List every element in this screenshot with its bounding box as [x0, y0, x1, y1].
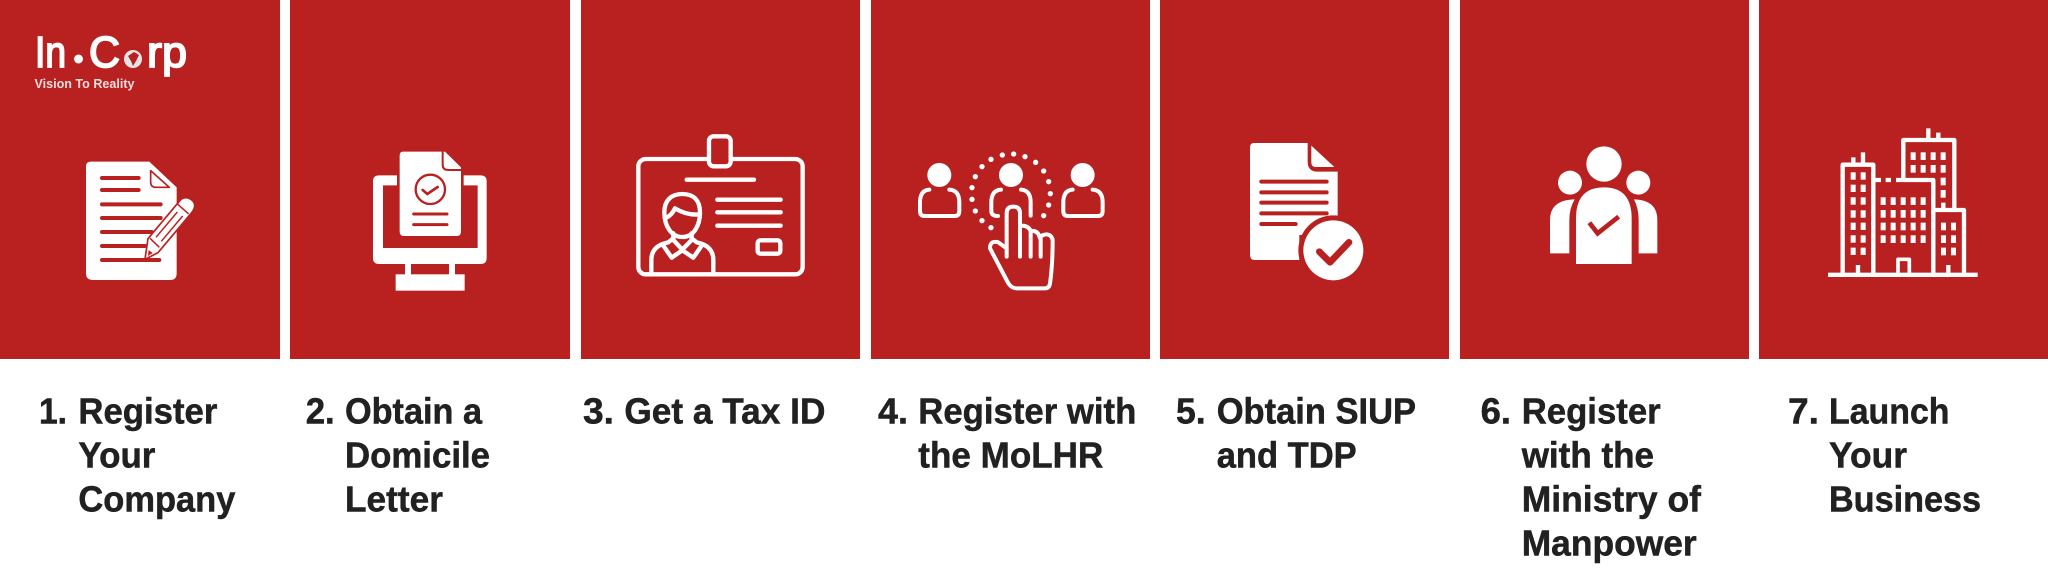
panel: step 2	[290, 0, 570, 359]
logo: InCorp: Vision To Reality	[34, 77, 135, 91]
caption: step 4: Register with	[918, 390, 1136, 432]
caption: step 7: 7.	[1788, 390, 1819, 432]
caption: step 1: Register	[78, 390, 217, 432]
panel: step 6	[1460, 0, 1749, 359]
icon: document with check badge	[1250, 143, 1368, 285]
icon: document with pencil	[86, 162, 195, 280]
logo: InCorp: C	[89, 28, 120, 77]
caption: step 7: Your	[1829, 434, 1907, 476]
caption: step 5: 5.	[1176, 390, 1206, 432]
icon: people selection with pointing hand	[920, 151, 1103, 288]
icon: team with check	[1550, 146, 1657, 264]
caption: step 1: Company	[78, 478, 235, 520]
caption: step 6: Ministry of	[1522, 478, 1702, 520]
icon: id card	[638, 136, 803, 274]
caption: step 5: Obtain SIUP	[1217, 390, 1416, 432]
caption: step 1	[39, 390, 235, 520]
panel: step 1	[0, 0, 280, 359]
icon: computer with document	[373, 151, 487, 291]
caption: step 4	[878, 390, 1136, 476]
caption: step 1: Your	[78, 434, 155, 476]
caption: step 5	[1176, 390, 1416, 476]
caption: step 6: with the	[1521, 434, 1654, 476]
logo: InCorp: In	[35, 28, 66, 77]
caption: step 7: Business	[1829, 478, 1981, 520]
panel: step 5	[1160, 0, 1449, 359]
caption: step 6: Manpower	[1522, 522, 1697, 564]
caption: step 6	[1481, 390, 1702, 564]
caption: step 2	[306, 390, 490, 520]
caption: step 2: Domicile	[345, 434, 490, 476]
caption: step 3: Get a Tax ID	[624, 390, 825, 432]
caption: step 4: 4.	[878, 390, 908, 432]
logo: InCorp: rp	[147, 28, 187, 77]
caption: step 2: Letter	[345, 478, 443, 520]
caption: step 5: and TDP	[1217, 434, 1357, 476]
caption: step 6: Register	[1522, 390, 1661, 432]
caption: step 2: Obtain a	[345, 390, 483, 432]
caption: step 3: 3.	[583, 390, 614, 432]
caption: step 4: the MoLHR	[918, 434, 1103, 476]
panel: step 3	[581, 0, 860, 359]
icon: city buildings	[1828, 128, 1978, 277]
caption: step 1: 1.	[39, 390, 67, 432]
caption: step 6: 6.	[1481, 390, 1511, 432]
caption: step 2: 2.	[306, 390, 335, 432]
caption: step 7: Launch	[1829, 390, 1950, 432]
panel: step 7	[1759, 0, 2048, 359]
caption: step 7	[1788, 390, 1981, 520]
logo: InCorp	[34, 28, 187, 91]
panel: step 4	[871, 0, 1150, 359]
